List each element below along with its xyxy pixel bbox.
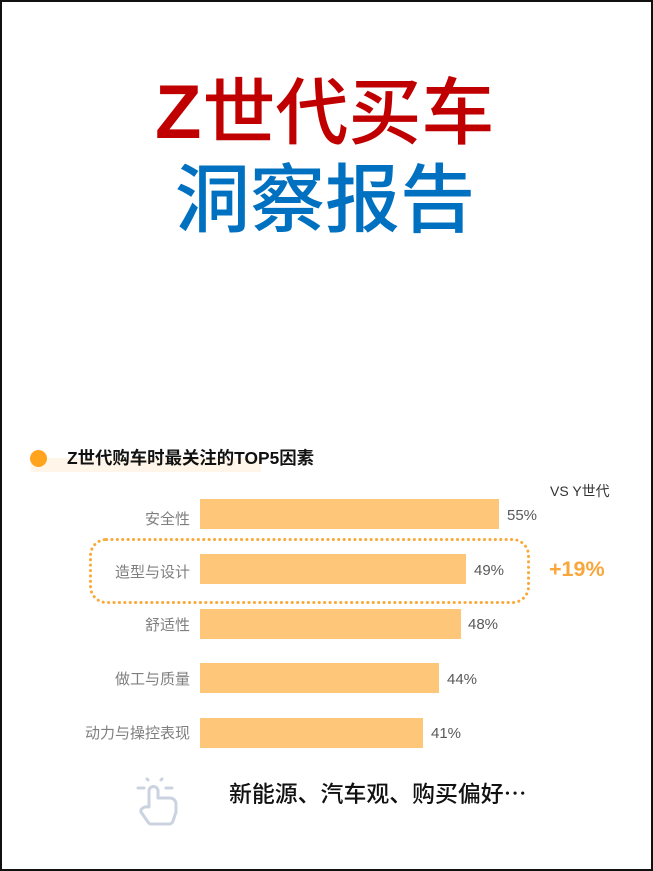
- row: 安全性 55%: [145, 499, 537, 529]
- row: 做工与质量 44%: 做工与质量: [115, 671, 190, 688]
- row: 做工与质量 44%: 44%: [447, 671, 477, 688]
- heading highlight band: [31, 458, 261, 472]
- row: 舒适性 48%: 舒适性: [145, 617, 190, 634]
- title: 洞察报告: 洞察报告: [175, 158, 475, 242]
- heading orange dot: [30, 450, 47, 467]
- heading text: Z世代购车时最关注的TOP5因素: [67, 448, 314, 468]
- row: 动力与操控表现 41%: 41%: [431, 725, 461, 742]
- highlight: dotted box around 造型与设计: [89, 538, 530, 604]
- row: 动力与操控表现 41%: 动力与操控表现: [85, 725, 190, 742]
- row: 造型与设计 49%: 49%: [474, 562, 504, 579]
- row: 造型与设计 49%: [115, 554, 504, 584]
- chart heading: [30, 448, 314, 472]
- row: 动力与操控表现 41%: [85, 718, 461, 748]
- row: 安全性 55%: 55%: [507, 507, 537, 524]
- footer text: 新能源、汽车观、购买偏好⋯: [229, 781, 527, 807]
- row: 造型与设计 49%: 造型与设计: [115, 564, 190, 581]
- row: 舒适性 48%: [145, 609, 498, 639]
- row: 做工与质量 44%: [115, 663, 477, 693]
- title: Z世代买车: Z世代买车: [155, 70, 494, 155]
- row: 舒适性 48%: 48%: [468, 616, 498, 633]
- column label: VS Y世代: VS Y世代: [550, 483, 610, 499]
- callout: +19%: +19%: [549, 557, 605, 581]
- icon: tapping hand: [136, 778, 178, 826]
- bar chart: top 5 factors: [85, 499, 537, 748]
- row: 安全性 55%: 安全性: [145, 511, 190, 528]
